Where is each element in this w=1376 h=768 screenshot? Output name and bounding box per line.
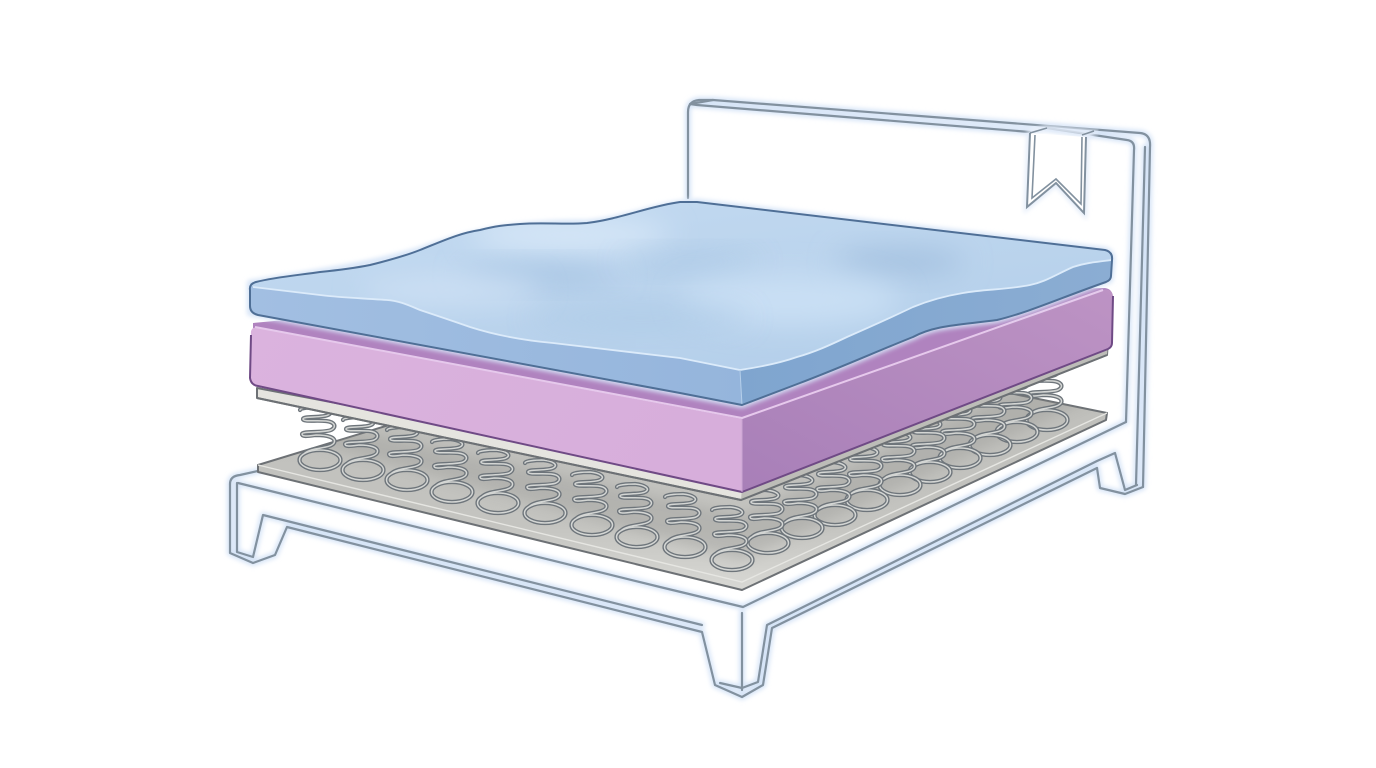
topper highlights: [253, 260, 1112, 370]
right row of springs: [748, 367, 1068, 553]
foam top sliver: [253, 288, 1112, 420]
topper outline: [250, 202, 1112, 405]
foam right side: [742, 290, 1113, 492]
illustration: layered bed: [225, 95, 1155, 702]
topper right side: [740, 260, 1112, 405]
surface shading: [360, 217, 965, 330]
purple foam layer: [250, 288, 1113, 492]
topper top surface: [250, 202, 1112, 370]
coil springs: [300, 367, 1068, 570]
support plate under foam: [257, 340, 1108, 500]
front row of springs: [300, 407, 752, 570]
base board: [257, 394, 1108, 591]
topper halo: [250, 202, 1112, 405]
bed frame and headboard: [230, 100, 1150, 697]
foam outlines: [250, 296, 1113, 492]
topper front side: [250, 286, 742, 405]
blue memory foam topper: [250, 202, 1112, 405]
foam front side: [250, 328, 742, 492]
bookmark tag on headboard: [1027, 128, 1094, 213]
